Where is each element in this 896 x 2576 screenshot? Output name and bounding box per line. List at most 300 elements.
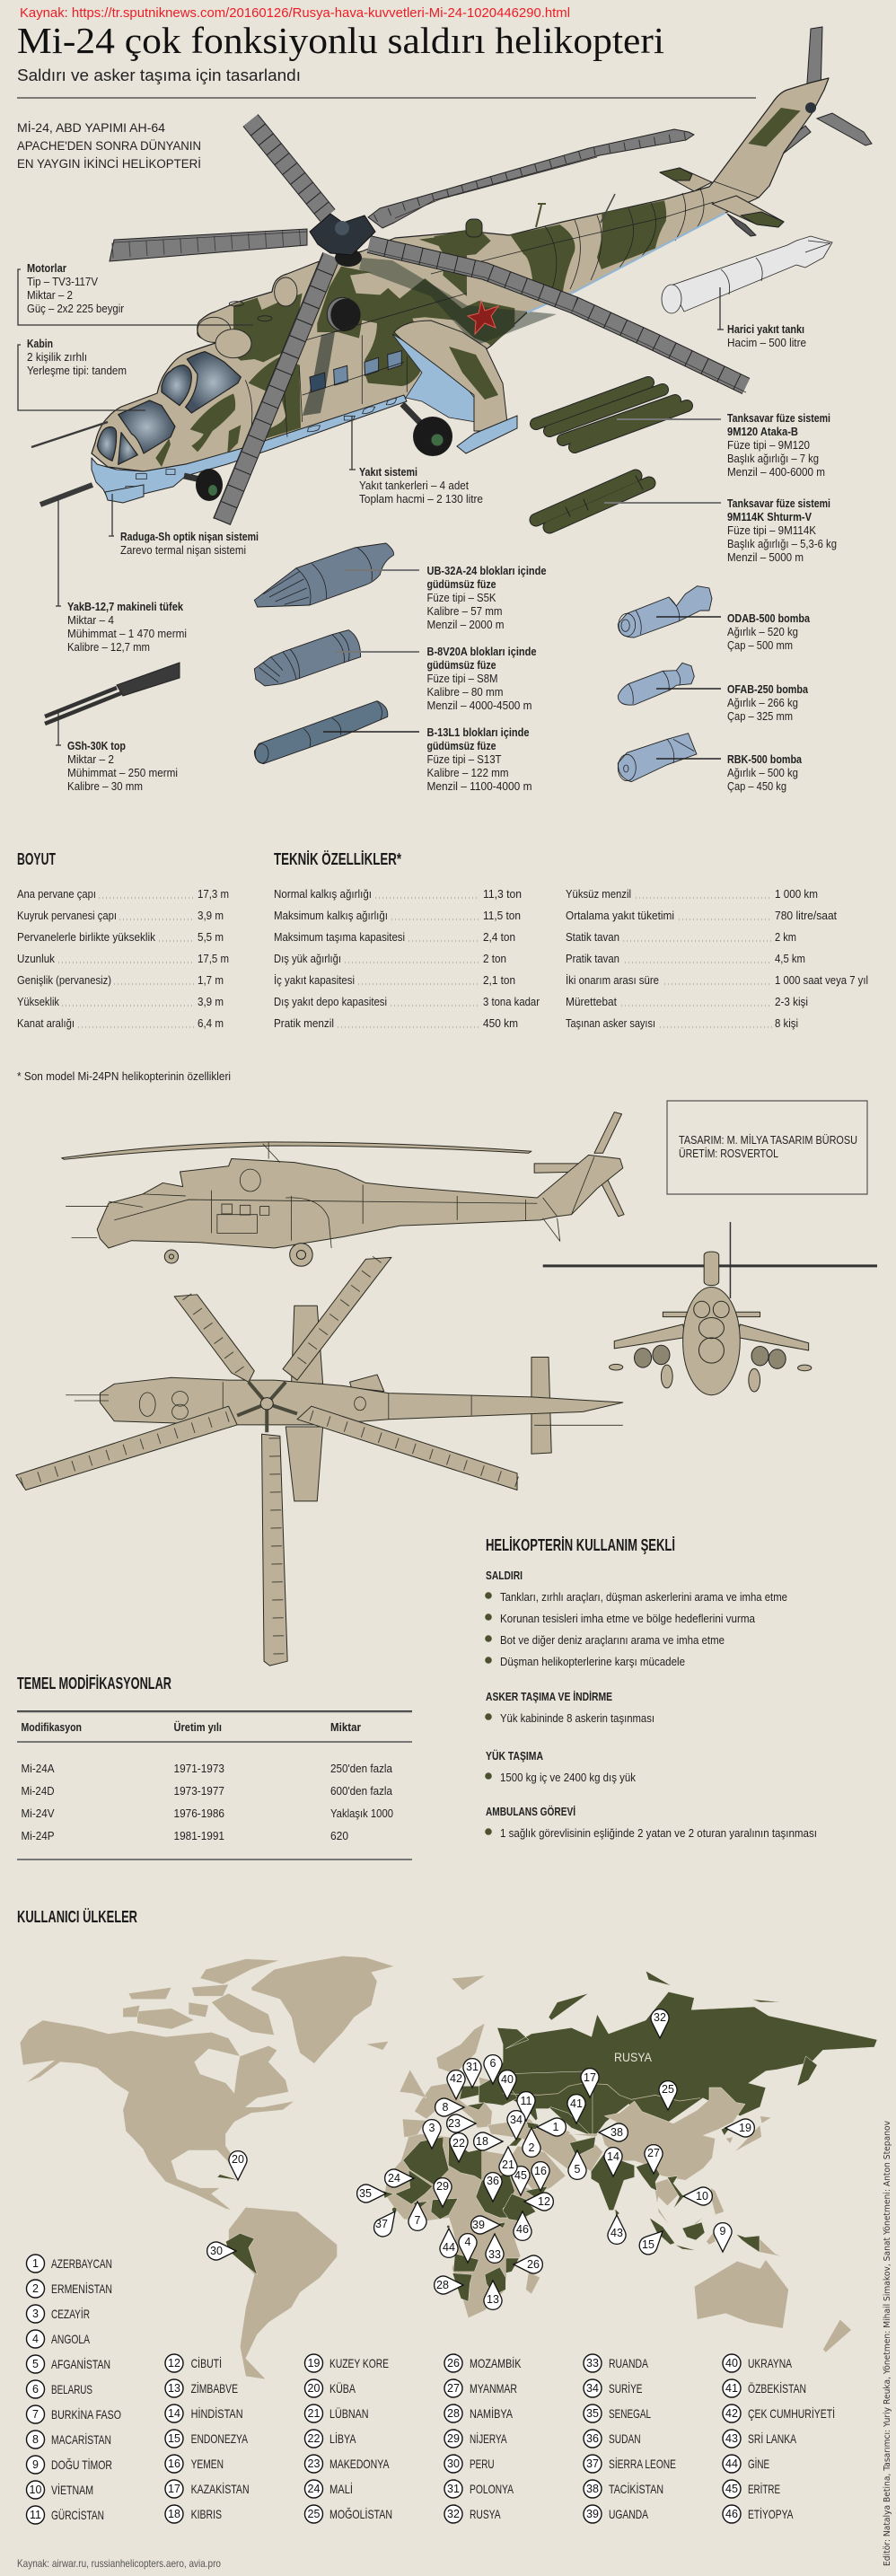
table: technical 2: 2-3 kişi <box>775 995 808 1008</box>
top view wings and tail <box>285 1306 551 1501</box>
engine nacelles <box>198 277 297 358</box>
label: cannon: GSh-30K top <box>67 739 126 752</box>
side view details <box>66 1142 594 1248</box>
front view rotor <box>543 1264 877 1267</box>
boom antenna <box>536 194 615 227</box>
pin 32 <box>651 2009 669 2038</box>
pin 11 <box>517 2092 535 2121</box>
legend numbers: 8 <box>32 2433 39 2446</box>
table rows: 1973-1977 <box>174 1784 224 1798</box>
leader Shturm <box>604 502 721 504</box>
blue under wing <box>392 334 476 422</box>
pin 38 <box>599 2123 628 2141</box>
pin 21 <box>499 2147 517 2176</box>
pin 25 <box>659 2081 677 2110</box>
legend names: BURKİNA FASO <box>51 2406 121 2422</box>
legend numbers: 10 <box>30 2484 41 2496</box>
nose probe <box>31 422 108 447</box>
pin 20 <box>229 2151 247 2180</box>
cannon <box>45 663 180 724</box>
table: dimensions: Pervanelerle birlikte yükseklik <box>17 930 155 944</box>
legend names: ERMENİSTAN <box>51 2281 112 2296</box>
legend numbers: 7 <box>32 2408 39 2421</box>
usage section <box>485 1536 817 1840</box>
B-13 pod <box>254 701 388 764</box>
label Ataka: Füze tipi – 9M120 <box>727 438 810 452</box>
table: technical 2: Pratik tavan <box>566 952 619 965</box>
cargo <box>485 1749 636 1784</box>
subtitle: Saldırı ve asker taşıma için tasarlandı <box>17 66 301 84</box>
pin 17: 17 <box>584 2071 596 2084</box>
legend <box>27 2255 741 2524</box>
label B-13: Menzil – 1100-4000 m <box>427 779 531 793</box>
label OFAB: Çap – 325 mm <box>727 709 793 723</box>
table: technical 1: Pratik menzil <box>274 1016 334 1030</box>
legend numbers: 12 <box>168 2357 180 2369</box>
pin 24 <box>385 2169 414 2187</box>
pin 8 <box>435 2098 464 2116</box>
pin 46: 46 <box>516 2223 529 2236</box>
pin 14: 14 <box>607 2150 619 2163</box>
label B-13: B-13L1 blokları içinde <box>427 725 530 739</box>
pin 16: 16 <box>534 2165 547 2177</box>
label: machine gun: Kalibre – 12,7 mm <box>67 640 150 654</box>
attack bullets <box>485 1590 787 1668</box>
missiles Ataka <box>536 382 687 447</box>
legend numbers: 28 <box>447 2407 460 2420</box>
table rows: Mi-24V <box>22 1807 55 1820</box>
label: cabin: Kabin <box>27 337 53 350</box>
pin 11: 11 <box>521 2095 532 2107</box>
label UB-32: Füze tipi – S5K <box>427 591 496 604</box>
table: dimensions: 3,9 m <box>198 909 224 922</box>
table: technical 1: 2,1 ton <box>483 973 515 987</box>
horizontal stabilizers <box>660 168 784 236</box>
leader: gun <box>56 499 61 606</box>
map: Asia <box>568 2088 783 2256</box>
pin 37 <box>371 2206 402 2240</box>
label B-13: Kalibre – 122 mm <box>427 766 508 779</box>
pin 16 <box>531 2162 549 2191</box>
pin 44: 44 <box>443 2241 455 2254</box>
pin 19: 19 <box>739 2122 751 2134</box>
heading: dimensions: BOYUT <box>17 850 56 868</box>
pin 23: 23 <box>448 2117 461 2130</box>
label B-8 <box>427 645 537 712</box>
leader OFAB <box>656 688 721 690</box>
legend names: SUDAN <box>609 2431 641 2446</box>
table: technical 2: Taşınan asker sayısı <box>566 1016 655 1030</box>
label: motors: Güç – 2x2 225 beygir <box>27 302 125 315</box>
legend numbers: 34 <box>586 2382 599 2395</box>
legend numbers: 11 <box>30 2509 41 2521</box>
table rows: 1981-1991 <box>174 1829 224 1842</box>
table: technical 1: Normal kalkış ağırlığı <box>274 887 372 901</box>
pin 29: 29 <box>436 2180 449 2193</box>
label: fuel system: Yakıt sistemi <box>359 465 417 479</box>
legend numbers: 35 <box>586 2407 599 2420</box>
legend numbers: 21 <box>308 2407 320 2420</box>
front view fuselage <box>683 1252 740 1395</box>
table rows: 620 <box>330 1829 348 1842</box>
fuel tank <box>662 236 832 313</box>
attack bullets: Düşman helikopterlerine karşı mücadele <box>500 1655 685 1668</box>
pin 4: 4 <box>465 2236 471 2248</box>
main helicopter <box>31 27 872 522</box>
top view hub <box>237 1382 297 1432</box>
label: external tank: Harici yakıt tankı <box>727 322 804 336</box>
legend names: BELARUS <box>51 2382 92 2396</box>
attack bullets: Korunan tesisleri imha etme ve bölge hedeflerini vurma <box>500 1612 756 1625</box>
table rows: 1971-1973 <box>174 1762 224 1775</box>
troop transport: Yük kabininde 8 askerin taşınması <box>500 1711 654 1725</box>
legend numbers: 15 <box>168 2432 180 2445</box>
label: motors <box>27 261 125 315</box>
map: Europe Africa green <box>383 2071 593 2301</box>
pin 10: 10 <box>696 2190 708 2202</box>
label: motors: Tip – TV3-117V <box>27 275 98 288</box>
UB-32 pod <box>254 543 394 607</box>
legend numbers: 14 <box>168 2407 180 2420</box>
pin 5: 5 <box>575 2163 581 2176</box>
intro text: EN YAYGIN İKİNCİ HELİKOPTERİ <box>17 157 201 171</box>
legend names: SENEGAL <box>609 2406 651 2421</box>
legend names: VİETNAM <box>51 2482 93 2497</box>
blade left <box>110 229 307 261</box>
map: seas <box>494 2108 550 2126</box>
tail rotor hub <box>805 102 816 113</box>
label Shturm: Tanksavar füze sistemi <box>727 497 830 510</box>
pin 46 <box>514 2211 531 2240</box>
legend names: NAMİBYA <box>470 2405 514 2421</box>
legend numbers: 26 <box>447 2357 460 2369</box>
leader: tank <box>717 287 724 330</box>
camouflage left <box>155 233 467 467</box>
pin 40: 40 <box>501 2073 514 2086</box>
table rules <box>17 1710 412 1860</box>
table: technical 1: Maksimum taşıma kapasitesi <box>274 930 405 944</box>
pin 25: 25 <box>662 2083 674 2096</box>
pin 6: 6 <box>490 2057 496 2070</box>
table: technical 2: Statik tavan <box>566 930 619 944</box>
table: technical 2: 1 000 km <box>775 887 818 901</box>
table rows: 600'den fazla <box>330 1784 393 1798</box>
rotor hub <box>310 214 375 267</box>
front view mast <box>729 1222 731 1298</box>
table: technical 1: 450 km <box>483 1016 518 1030</box>
credits vertical: Editör: Natalya Betina, Tasarımcı: Yuriy Reuka, Yönetmen: Mihail Simakov, Sanat Yönetmeni: Anton Stepanov <box>883 2121 892 2566</box>
legend numbers <box>30 2257 738 2521</box>
pin 34: 34 <box>510 2114 523 2126</box>
table header <box>22 1720 361 1734</box>
label UB-32: Menzil – 2000 m <box>427 618 505 631</box>
design box: ÜRETİM: ROSVERTOL <box>679 1147 778 1160</box>
label: machine gun: YakB-12,7 makineli tüfek <box>67 600 184 613</box>
label OFAB: Ağırlık – 266 kg <box>727 696 798 709</box>
label: motors: Motorlar <box>27 261 66 275</box>
legend names: GİNE <box>748 2456 769 2471</box>
pin 30: 30 <box>210 2245 223 2257</box>
exhaust cap <box>466 219 482 237</box>
pin 26: 26 <box>527 2258 540 2271</box>
pin 12 <box>524 2193 553 2211</box>
legend names: ERİTRE <box>748 2481 780 2496</box>
legend numbers: 3 <box>32 2308 39 2320</box>
legend names: MACARİSTAN <box>51 2431 111 2447</box>
table: technical 1: 3 tona kadar <box>483 995 540 1008</box>
blade upper left <box>250 120 328 215</box>
label Shturm: Başlık ağırlığı – 5,3-6 kg <box>727 537 837 550</box>
label UB-32: Kalibre – 57 mm <box>427 604 503 618</box>
legend names: ENDONEZYA <box>191 2431 248 2446</box>
table: dimensions: 5,5 m <box>198 930 224 944</box>
label: machine gun <box>67 600 187 654</box>
legend names: ZİMBABVE <box>191 2380 238 2396</box>
label: optic sight: Raduga-Sh optik nişan sistemi <box>120 530 259 543</box>
pin 9: 9 <box>720 2225 726 2238</box>
pin 38: 38 <box>611 2126 623 2139</box>
leader Ataka <box>617 418 721 420</box>
legend names: KAZAKİSTAN <box>191 2481 250 2496</box>
label: cannon <box>67 739 178 793</box>
legend numbers: 31 <box>447 2483 460 2495</box>
pin 3: 3 <box>429 2122 435 2134</box>
side view fuselage <box>97 1155 623 1248</box>
front view wheels <box>610 1364 812 1392</box>
legend names: KUZEY KORE <box>329 2356 389 2370</box>
heading: usage: HELİKOPTERİN KULLANIM ŞEKLİ <box>486 1536 675 1554</box>
legend numbers: 25 <box>308 2508 320 2520</box>
legend names: SRİ LANKA <box>748 2431 796 2446</box>
sources: Kaynak: airwar.ru, russianhelicopters.aero, avia.pro <box>17 2557 221 2570</box>
cabin windows <box>310 351 401 392</box>
legend numbers: 39 <box>586 2508 599 2520</box>
label Russia: RUSYA <box>614 2050 653 2064</box>
pin 36 <box>484 2173 502 2202</box>
ambulance: 1 sağlık görevlisinin eşliğinde 2 yatan ve 2 oturan yaralının taşınması <box>500 1826 817 1840</box>
blue boom strip <box>527 213 725 312</box>
OFAB bomb <box>618 663 694 705</box>
table: technical 2: Ortalama yakıt tüketimi <box>566 909 674 922</box>
pin 1: 1 <box>553 2121 559 2133</box>
legend numbers: 24 <box>308 2483 320 2495</box>
label B-13: güdümsüz füze <box>427 739 496 752</box>
pin 19 <box>725 2119 754 2137</box>
legend names: GÜRCİSTAN <box>51 2507 104 2522</box>
map pins <box>207 2009 754 2309</box>
pin 37: 37 <box>375 2218 388 2230</box>
pin 7 <box>408 2202 426 2230</box>
label B-8: Menzil – 4000-4500 m <box>427 699 531 712</box>
legend numbers: 33 <box>586 2357 599 2369</box>
label: cabin: Yerleşme tipi: tandem <box>27 364 127 377</box>
map: Asia green <box>569 2123 760 2252</box>
label OFAB <box>727 682 809 723</box>
ambulance: AMBULANS GÖREVİ <box>486 1805 575 1818</box>
table rows <box>22 1762 393 1842</box>
leader: fuel <box>349 416 356 470</box>
legend names: ÇEK CUMHURİYETİ <box>748 2405 835 2421</box>
pin 27 <box>645 2145 663 2174</box>
legend numbers: 6 <box>32 2383 39 2396</box>
legend names: RUSYA <box>470 2507 501 2521</box>
table: dimensions: 3,9 m <box>198 995 224 1008</box>
label ODAB: ODAB-500 bomba <box>727 611 811 625</box>
ODAB bomb <box>618 586 712 637</box>
label: cannon: Miktar – 2 <box>67 752 114 766</box>
pin 30 <box>207 2242 236 2260</box>
table: technical 2: 780 litre/saat <box>775 909 837 922</box>
pin 26 <box>514 2255 542 2273</box>
stub wing <box>394 321 508 431</box>
table: technical 1: 2,4 ton <box>483 930 515 944</box>
legend names: TACİKİSTAN <box>609 2481 663 2496</box>
pin 17 <box>581 2069 599 2097</box>
top view details <box>66 1382 623 1425</box>
pin 43 <box>608 2215 626 2244</box>
label UB-32 <box>427 564 546 631</box>
legend names: SURİYE <box>609 2380 643 2396</box>
legend numbers: 37 <box>586 2457 599 2470</box>
legend names: LÜBNAN <box>329 2405 368 2421</box>
label: optic sight: Zarevo termal nişan sistemi <box>120 543 246 557</box>
table: technical 2: 4,5 km <box>775 952 805 965</box>
pin 41: 41 <box>570 2097 583 2110</box>
table rows: Mi-24A <box>22 1762 55 1775</box>
legend names: RUANDA <box>609 2356 648 2370</box>
legend numbers: 46 <box>725 2508 738 2520</box>
legend names: HİNDİSTAN <box>191 2405 243 2421</box>
label: motors: Miktar – 2 <box>27 288 73 302</box>
map: Europe Africa Middle East tan <box>384 2023 593 2318</box>
pin 2: 2 <box>529 2141 535 2154</box>
legend numbers: 29 <box>447 2432 460 2445</box>
label B-8: Kalibre – 80 mm <box>427 685 503 699</box>
nose wheel <box>184 469 223 501</box>
table: dimensions: Uzunluk <box>17 952 55 965</box>
engine intake <box>327 297 361 331</box>
pin 32: 32 <box>654 2011 666 2024</box>
leader ODAB <box>656 616 721 618</box>
legend numbers: 43 <box>725 2432 738 2445</box>
intro text <box>17 121 201 171</box>
front view pods <box>635 1345 786 1368</box>
pin 24: 24 <box>388 2172 400 2185</box>
table: dimensions: Ana pervane çapı <box>17 887 96 901</box>
legend names: KÜBA <box>329 2380 356 2396</box>
pin 13: 13 <box>487 2293 499 2306</box>
label: external tank: Hacim – 500 litre <box>727 336 806 349</box>
red star <box>468 301 498 334</box>
legend names: DOĞU TİMOR <box>51 2457 112 2472</box>
pin 7: 7 <box>415 2214 421 2227</box>
table: technical 1: Dış yük ağırlığı <box>274 952 341 965</box>
legend numbers: 17 <box>168 2483 180 2495</box>
label: cannon: Kalibre – 30 mm <box>67 779 143 793</box>
troop transport <box>485 1690 654 1725</box>
cargo: YÜK TAŞIMA <box>486 1749 543 1763</box>
pin 9 <box>714 2223 732 2252</box>
label ODAB: Ağırlık – 520 kg <box>727 625 798 638</box>
legend numbers: 18 <box>168 2508 180 2520</box>
pin 23 <box>447 2114 476 2132</box>
pin 40 <box>498 2070 516 2099</box>
heading: technical: TEKNİK ÖZELLİKLER* <box>274 850 401 868</box>
canopy <box>97 352 241 464</box>
table: technical 2 <box>566 887 868 1030</box>
top view blades <box>16 1257 517 1666</box>
legend names: ETİYOPYA <box>748 2506 794 2521</box>
pin 1 <box>537 2118 566 2136</box>
leader B-8 <box>336 651 419 653</box>
table rows: 250'den fazla <box>330 1762 393 1775</box>
pin 33 <box>486 2234 504 2263</box>
legend names <box>51 2256 835 2522</box>
world map <box>20 1956 877 2379</box>
legend names: MYANMAR <box>470 2381 517 2396</box>
legend names: SİERRA LEONE <box>609 2456 676 2471</box>
label UB-32: UB-32A-24 blokları içinde <box>427 564 546 577</box>
top view fuselage <box>100 1377 623 1425</box>
label: external tank <box>727 322 806 349</box>
legend numbers: 19 <box>308 2357 320 2369</box>
label: cabin: 2 kişilik zırhlı <box>27 350 87 364</box>
intro text: APACHE'DEN SONRA DÜNYANIN <box>17 139 201 153</box>
table: technical 1: 2 ton <box>483 952 506 965</box>
pin 22: 22 <box>452 2137 465 2150</box>
attack bullets: Tankları, zırhlı araçları, düşman askerlerini arama ve imha etme <box>500 1590 787 1604</box>
legend numbers: 32 <box>447 2508 460 2520</box>
legend names: PERU <box>470 2457 495 2471</box>
label Shturm: 9M114K Shturm-V <box>727 510 812 523</box>
side view <box>62 1112 624 1266</box>
attack bullets: Bot ve diğer deniz araçlarını arama ve imha etme <box>500 1633 725 1647</box>
pin 15 <box>636 2225 669 2258</box>
table rows: Mi-24D <box>22 1784 54 1798</box>
legend numbers: 42 <box>725 2407 738 2420</box>
blade lower left <box>214 254 331 522</box>
blue belly <box>92 395 407 501</box>
pin 39: 39 <box>472 2219 485 2231</box>
pin 15: 15 <box>642 2238 654 2251</box>
legend names: MALİ <box>329 2481 353 2496</box>
modifications <box>17 1675 412 1860</box>
legend names: UKRAYNA <box>748 2356 792 2370</box>
heading: modifications: TEMEL MODİFİKASYONLAR <box>17 1675 171 1692</box>
wing camouflage <box>449 347 498 400</box>
label OFAB: OFAB-250 bomba <box>727 682 809 696</box>
table: technical 2: 8 kişi <box>775 1016 798 1030</box>
pin 28 <box>435 2276 463 2294</box>
tail rotor <box>751 27 872 175</box>
pin 39 <box>471 2216 500 2234</box>
legend names: ANGOLA <box>51 2332 90 2346</box>
cargo: 1500 kg iç ve 2400 kg dış yük <box>500 1771 636 1784</box>
pin 36: 36 <box>487 2175 499 2187</box>
legend numbers: 45 <box>725 2483 738 2495</box>
legend names: KIBRIS <box>191 2507 222 2521</box>
legend numbers: 20 <box>308 2382 320 2395</box>
B-8 pod <box>254 630 361 686</box>
legend numbers: 22 <box>308 2432 320 2445</box>
legend numbers: 36 <box>586 2432 599 2445</box>
label ODAB <box>727 611 811 652</box>
pin 31: 31 <box>466 2061 479 2073</box>
legend numbers: 27 <box>447 2382 460 2395</box>
blade lower right <box>369 244 746 392</box>
table: technical 2: Mürettebat <box>566 995 617 1008</box>
intro text: Mİ-24, ABD YAPIMI AH-64 <box>17 121 166 135</box>
